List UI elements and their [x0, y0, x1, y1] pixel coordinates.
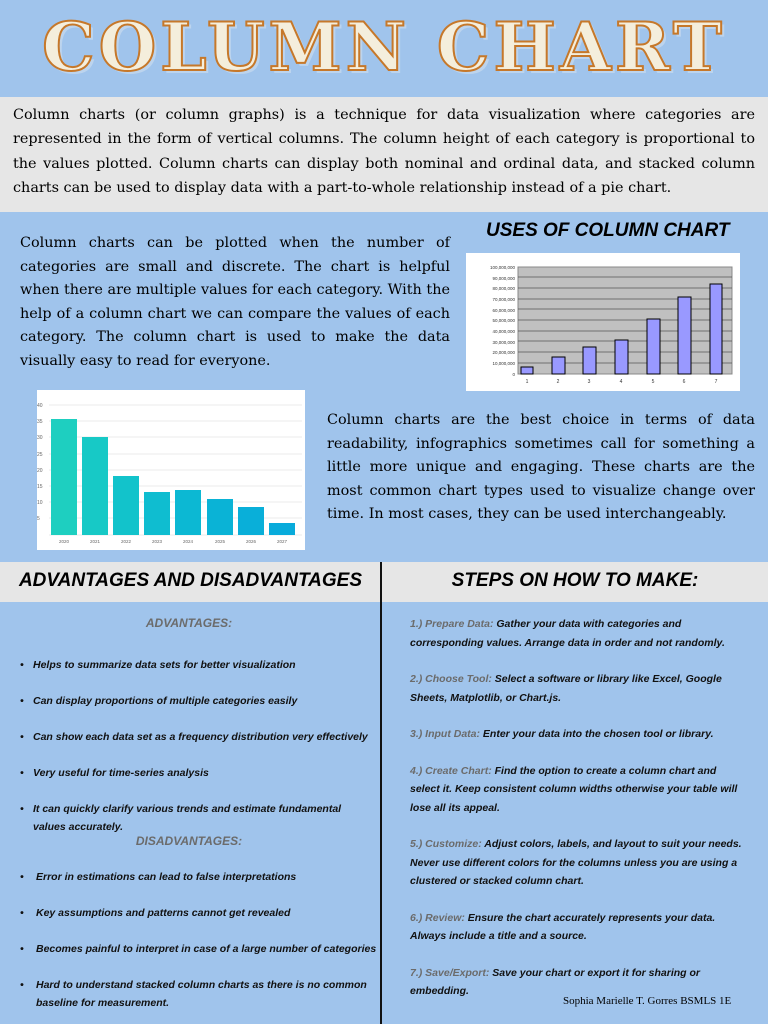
- text block: when to use: Column charts can be plotted when the number of categories are small and discrete. The chart is helpful when there are multiple values for each category. With the help of a column chart we can compare the values of each category. The column chart is used to make the data visually easy to read for everyone.: [20, 235, 450, 368]
- panel: advantages: Can show each data set as a frequency distribution very effectively: [33, 731, 368, 743]
- chart: grey bar chart: 60,000,000: [492, 308, 515, 313]
- panel: disadvantages: [20, 834, 376, 1009]
- chart: teal bar chart: 2027: [277, 539, 288, 544]
- chart: grey bar chart: 50,000,000: [492, 318, 515, 323]
- chart: grey bar chart: 0: [512, 372, 515, 377]
- divider: [380, 562, 382, 1024]
- chart: grey bar chart: 70,000,000: [492, 297, 515, 302]
- panel: steps: 2.) Choose Tool: Select a software or library like Excel, Google Sheets, Matplotlib, or Chart.js.: [410, 673, 722, 704]
- heading: uses: USES OF COLUMN CHART: [486, 220, 729, 241]
- panel: steps: 6.) Review: Ensure the chart accurately represents your data. Always include a title and a source.: [410, 912, 715, 942]
- chart: teal bar chart: [37, 390, 305, 550]
- chart: teal bar chart: 5: [37, 516, 40, 522]
- panel: steps: 1.) Prepare Data: Gather your data with categories and corresponding values. Arrange data in order and not randomly.: [410, 618, 725, 648]
- intro band: Column charts (or column graphs) is a technique for data visualization where categories are represented in the form of vertical columns. The column height of each category is proportional to the values plotted. Column charts can display both nominal and ordinal data, and stacked column charts can be used to display data with a part-to-whole relationship instead of a pie chart.: [13, 107, 755, 196]
- chart: teal bar chart: 2022: [121, 539, 132, 544]
- chart: teal bar chart: 2025: [215, 539, 226, 544]
- chart: grey bar chart: 80,000,000: [492, 286, 515, 291]
- author credit: Sophia Marielle T. Gorres BSMLS 1E: [563, 995, 731, 1007]
- panel: advantages: Helps to summarize data sets for better visualization: [33, 659, 296, 671]
- panel: advantages: values accurately.: [33, 821, 123, 833]
- panel: disadvantages: Becomes painful to interpret in case of a large number of categories: [36, 943, 376, 955]
- chart: grey bar chart: 2: [557, 379, 560, 385]
- chart: grey bar chart: 100,000,000: [490, 265, 515, 270]
- heading: steps: STEPS ON HOW TO MAKE:: [452, 570, 698, 591]
- chart: grey bar chart: 20,000,000: [492, 350, 515, 355]
- chart: grey bar chart: 30,000,000: [492, 340, 515, 345]
- chart: grey bar chart: 6: [683, 379, 686, 385]
- panel: advantages: Very useful for time-series analysis: [33, 767, 209, 779]
- chart: grey bar chart: 10,000,000: [492, 361, 515, 366]
- heading: advantages and disadvantages: ADVANTAGES AND DISADVANTAGES: [19, 570, 362, 591]
- chart: teal bar chart: 30: [37, 435, 43, 441]
- chart: grey bar chart: 90,000,000: [492, 276, 515, 281]
- chart: teal bar chart: 2021: [90, 539, 101, 544]
- panel: disadvantages: Key assumptions and patterns cannot get revealed: [36, 907, 290, 919]
- panel: steps: 4.) Create Chart: Find the option to create a column chart and: [410, 764, 716, 776]
- panel: advantages: It can quickly clarify various trends and estimate fundamental: [33, 803, 341, 815]
- panel: disadvantages: baseline for measurement.: [36, 997, 169, 1009]
- chart: teal bar chart: 2020: [59, 539, 70, 544]
- panel: advantages: Can display proportions of multiple categories easily: [33, 695, 297, 707]
- chart: grey bar chart: 5: [652, 379, 655, 385]
- chart: teal bar chart: 2024: [183, 539, 194, 544]
- chart: grey bar chart: 1: [526, 379, 529, 385]
- panel: disadvantages: Error in estimations can lead to false interpretations: [36, 871, 296, 883]
- panel: steps: 5.) Customize: Adjust colors, labels, and layout to suit your needs. Never use different colors for the columns unless you are using a clustered or stacked column chart.: [410, 838, 742, 887]
- chart: teal bar chart: 20: [37, 468, 43, 474]
- chart: teal bar chart: 10: [37, 500, 43, 506]
- heading band: [0, 562, 768, 602]
- title: COLUMN CHART: [42, 8, 726, 86]
- text block: best choice: Column charts are the best choice in terms of data readability, infographics sometimes call for something a little more unique and engaging. These charts are the most common chart types used to visualize change over time. In most cases, they can be used interchangeably.: [327, 412, 755, 522]
- chart: teal bar chart: 25: [37, 452, 43, 458]
- chart: grey bar chart: 4: [620, 379, 623, 385]
- panel: disadvantages: Hard to understand stacked column charts as there is no common: [36, 979, 367, 991]
- chart: grey bar chart: 7: [715, 379, 718, 385]
- panel: steps: 7.) Save/Export: Save your chart or export it for sharing or embedding.: [410, 966, 700, 997]
- chart: grey bar chart: 40,000,000: [492, 329, 515, 334]
- panel: steps: 3.) Input Data: Enter your data into the chosen tool or library.: [410, 728, 714, 740]
- panel: disadvantages: DISADVANTAGES:: [136, 834, 242, 848]
- chart: teal bar chart: 15: [37, 484, 43, 490]
- chart: teal bar chart: 2026: [246, 539, 257, 544]
- panel: advantages: [20, 616, 368, 833]
- chart: grey bar chart: 3: [588, 379, 591, 385]
- chart: grey bar chart: [466, 253, 740, 391]
- chart: teal bar chart: 40: [37, 403, 43, 409]
- panel: steps: select it. Keep consistent column widths otherwise your table will lose all its appeal.: [410, 783, 737, 814]
- chart: teal bar chart: 35: [37, 419, 43, 425]
- chart: teal bar chart: 2023: [152, 539, 163, 544]
- panel: advantages: ADVANTAGES:: [146, 616, 232, 630]
- panel: steps: [410, 618, 742, 997]
